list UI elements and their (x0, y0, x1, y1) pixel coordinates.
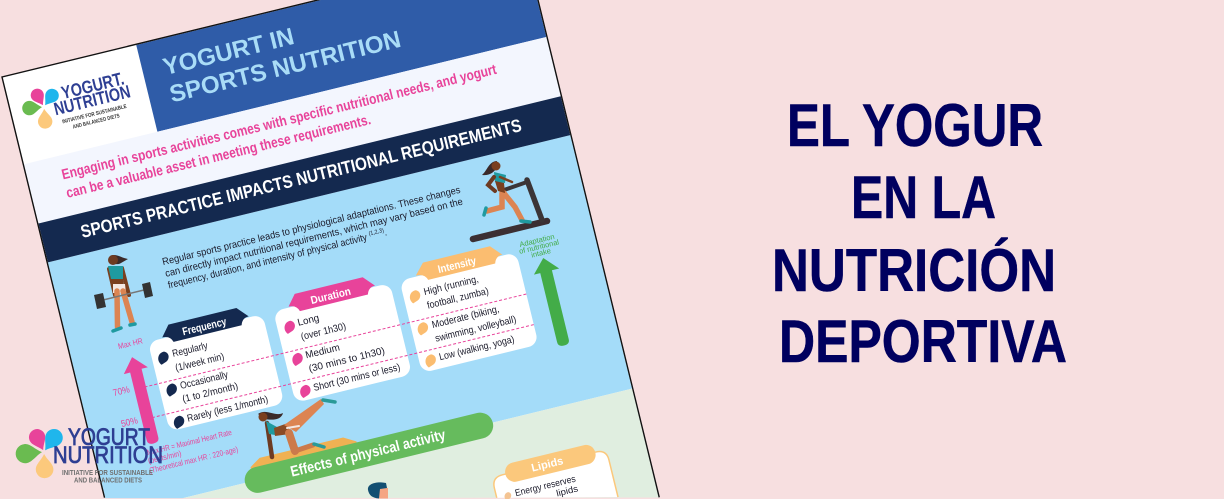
arrow: adaptation of nutritional intake (531, 255, 577, 348)
panel: sports practice section (38, 96, 632, 499)
title: SPORTS NUTRITION (167, 26, 404, 108)
intro text (60, 62, 503, 202)
body paragraph: can directly impact nutritional requirements, which may vary based on the (164, 197, 464, 280)
adaptation label (517, 231, 562, 262)
poster outline (2, 0, 659, 499)
card: duration: (over 1h30) (300, 321, 347, 343)
poster logo wordmark: YOGURT. (59, 68, 126, 103)
card: intensity: High (running, (423, 274, 480, 298)
card: intensity: Moderate (biking, (431, 304, 500, 331)
heart rate labels: Max HR (117, 336, 144, 351)
threshold dashed lines (135, 294, 535, 420)
logo wordmark (53, 424, 163, 469)
logo: yogurt nutrition overlay (15, 424, 163, 484)
card: intensity: football, zumba) (426, 286, 490, 312)
illustration: deadlift athlete (94, 255, 153, 331)
card: duration: (30 mins to 1h30) (308, 346, 386, 375)
heart rate labels: (beats/min) (147, 449, 183, 466)
intro text: can be a valuable asset in meeting these requirements. (65, 112, 373, 202)
card: lipids: Lipids (530, 455, 565, 475)
logo wordmark: NUTRITION (53, 442, 163, 469)
headline: el yogur en la nutrición deportiva: DEPORTIVA (779, 308, 1067, 375)
card: duration: Duration (309, 286, 352, 307)
adaptation label: intake (530, 246, 552, 260)
icon: poster logo petals (17, 82, 69, 134)
headline: el yogur en la nutrición deportiva: EL YOGUR (787, 92, 1043, 159)
card: intensity: swimming, volleyball) (434, 314, 517, 345)
heart rate labels: (Theoretical max HR : 220-age) (148, 445, 239, 475)
section heading band: SPORTS PRACTICE IMPACTS NUTRITIONAL REQUIREMENTS (79, 115, 523, 242)
poster logo wordmark: AND BALANCED DIETS (72, 113, 121, 131)
panel: title banner (136, 0, 546, 132)
title: YOGURT IN (160, 23, 297, 81)
logo tagline (62, 468, 153, 484)
card: frequency (145, 302, 285, 433)
body paragraph: (1,2,3) (368, 228, 385, 238)
heart rate labels: 70% (112, 384, 131, 399)
adaptation label: Adaptation (518, 232, 555, 249)
card: frequency: Occasionally (179, 370, 229, 392)
poster logo wordmark: INITIATIVE FOR SUSTAINABLE (62, 104, 128, 125)
panel: intro statement (24, 37, 561, 224)
card: intensity: Intensity (437, 255, 478, 276)
icon: logo petals (15, 425, 66, 478)
heart rate labels: Max HR = Maximal Heart Rate (146, 428, 233, 457)
card: duration (270, 271, 412, 403)
card: frequency: Rarely (less 1/month) (186, 394, 269, 425)
body paragraph: Regular sports practice leads to physiological adaptations. These changes (161, 185, 462, 268)
panel: logo area (3, 45, 158, 165)
logo tagline: INITIATIVE FOR SUSTAINABLE (62, 468, 153, 477)
poster logo wordmark: NUTRITION (52, 81, 132, 119)
illustration: floor exercise athlete (258, 399, 335, 457)
card: lipids (490, 440, 618, 499)
headline: el yogur en la nutrición deportiva: EN LA (851, 164, 996, 231)
logo wordmark: YOGURT (68, 424, 150, 451)
illustration: treadmill runner (473, 161, 547, 239)
panel: effects section (178, 368, 659, 499)
arrow: heart rate scale (120, 354, 166, 446)
poster logo wordmark (49, 68, 136, 134)
heart rate labels: 50% (120, 415, 140, 430)
intro text: Engaging in sports activities comes with specific nutritional needs, and yogurt (60, 62, 498, 183)
adaptation label: of nutritional (518, 237, 560, 256)
poster: yogurt in sports nutrition (2, 0, 659, 499)
yoga mat (249, 435, 358, 474)
illustration: man head (368, 482, 388, 498)
card: frequency: (1 to 2/month) (181, 381, 239, 405)
card: duration: Short (30 mins or less) (312, 362, 401, 394)
heart rate labels (102, 320, 239, 479)
headline: el yogur en la nutrición deportiva (772, 92, 1067, 375)
heading pill: effects of physical activity (242, 410, 496, 496)
heading pill: effects of physical activity: Effects of physical activity (289, 426, 448, 481)
card: duration: Long (296, 313, 320, 329)
card: intensity: Low (walking, yoga) (438, 334, 516, 363)
card: lipids: Energy reserves (514, 474, 577, 499)
card: frequency: (1/week min) (174, 352, 225, 374)
headline: el yogur en la nutrición deportiva: NUTRICIÓN (772, 237, 1056, 304)
card: duration: Medium (304, 342, 341, 361)
logo tagline: AND BALANCED DIETS (74, 476, 142, 484)
card: frequency: Regularly (171, 341, 209, 360)
body paragraph: frequency, duration, and intensity of physical activity (167, 226, 393, 291)
card: frequency: Frequency (181, 316, 228, 338)
card: intensity (397, 241, 539, 373)
body paragraph: . (383, 227, 388, 239)
card: lipids: lipids (555, 483, 579, 498)
